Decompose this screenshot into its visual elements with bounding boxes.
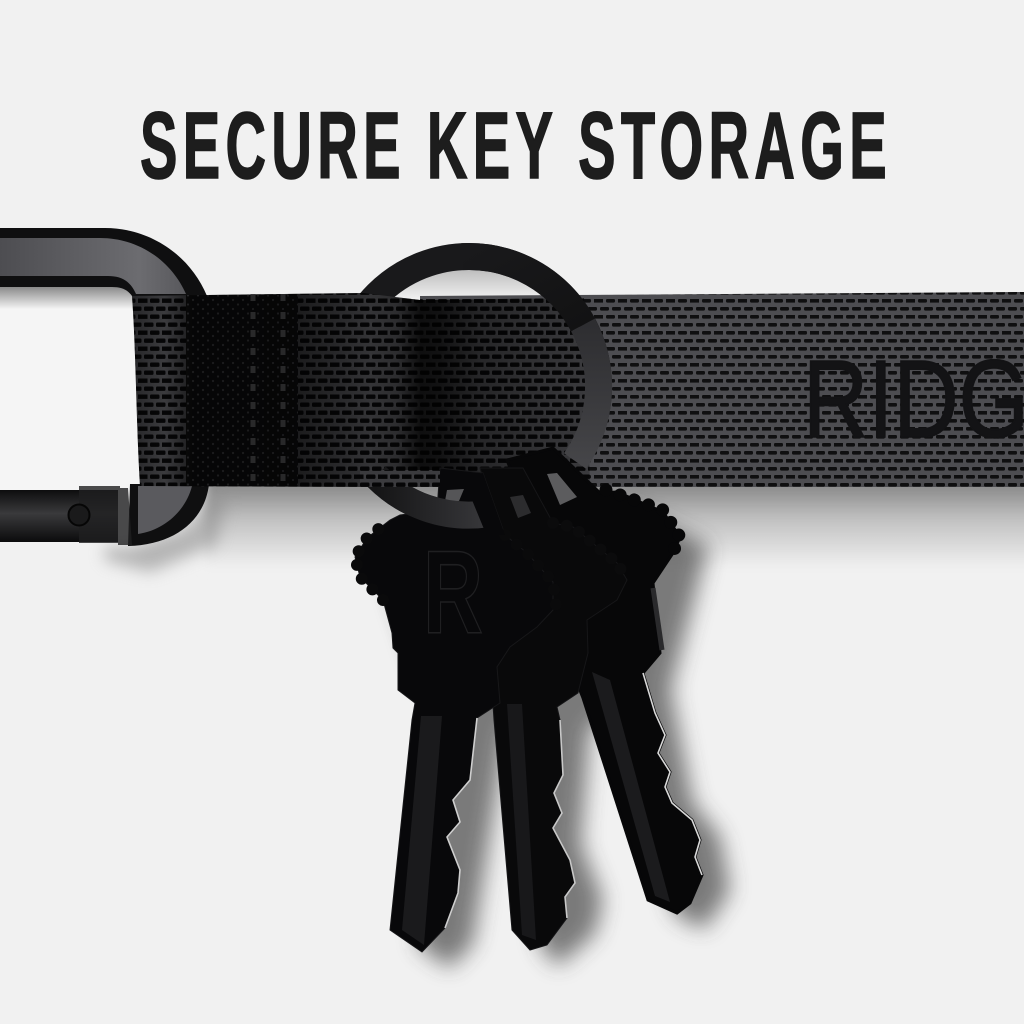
ring lit segment	[575, 325, 599, 461]
split ring front arc	[462, 257, 599, 461]
key 2 blade groove	[507, 704, 536, 940]
key 3 head side edge	[653, 588, 662, 650]
carabiner lower face	[138, 486, 192, 534]
key 1 brand mark: R	[423, 527, 483, 659]
key 1 cut edge	[445, 718, 477, 928]
carabiner inner shadow	[0, 287, 134, 309]
key shadows	[388, 506, 730, 968]
key 1	[355, 468, 556, 952]
ring lower arc	[376, 476, 486, 515]
strap edge over ring	[360, 470, 440, 487]
key 3	[507, 448, 702, 913]
ring opening shadow	[393, 270, 545, 298]
carabiner lower curve	[128, 484, 209, 546]
key 2 scalloped edge	[553, 523, 627, 580]
strap cast shadow	[205, 478, 1024, 568]
split ring back	[340, 256, 598, 516]
strap loop	[132, 293, 590, 487]
gate pin	[68, 504, 90, 526]
stitch lines	[253, 294, 283, 487]
key 1 bow over ring	[463, 473, 505, 535]
key 1 scalloped edge	[355, 520, 556, 605]
carabiner top face highlight	[0, 238, 186, 294]
right strap webbing	[420, 292, 1024, 487]
key holes	[445, 473, 577, 518]
key 3 blade groove	[592, 672, 670, 902]
key 1 blade groove	[402, 716, 442, 945]
key 2 cut edge	[553, 720, 575, 918]
carabiner interior	[0, 285, 140, 490]
loop shading	[132, 293, 590, 487]
key 2 hole	[510, 495, 531, 518]
loop dense weave band	[186, 295, 298, 486]
keys	[355, 448, 702, 952]
key 3 hole	[547, 473, 577, 505]
gate collar	[79, 486, 132, 545]
key 2	[480, 468, 627, 950]
carabiner top bar	[0, 228, 207, 296]
carabiner gate	[0, 490, 118, 542]
key 3 cut edge	[643, 673, 702, 875]
carabiner cast shadow	[105, 490, 226, 572]
loop base	[132, 293, 590, 487]
key 3 scalloped edge	[606, 490, 680, 558]
carabiner	[0, 228, 209, 546]
